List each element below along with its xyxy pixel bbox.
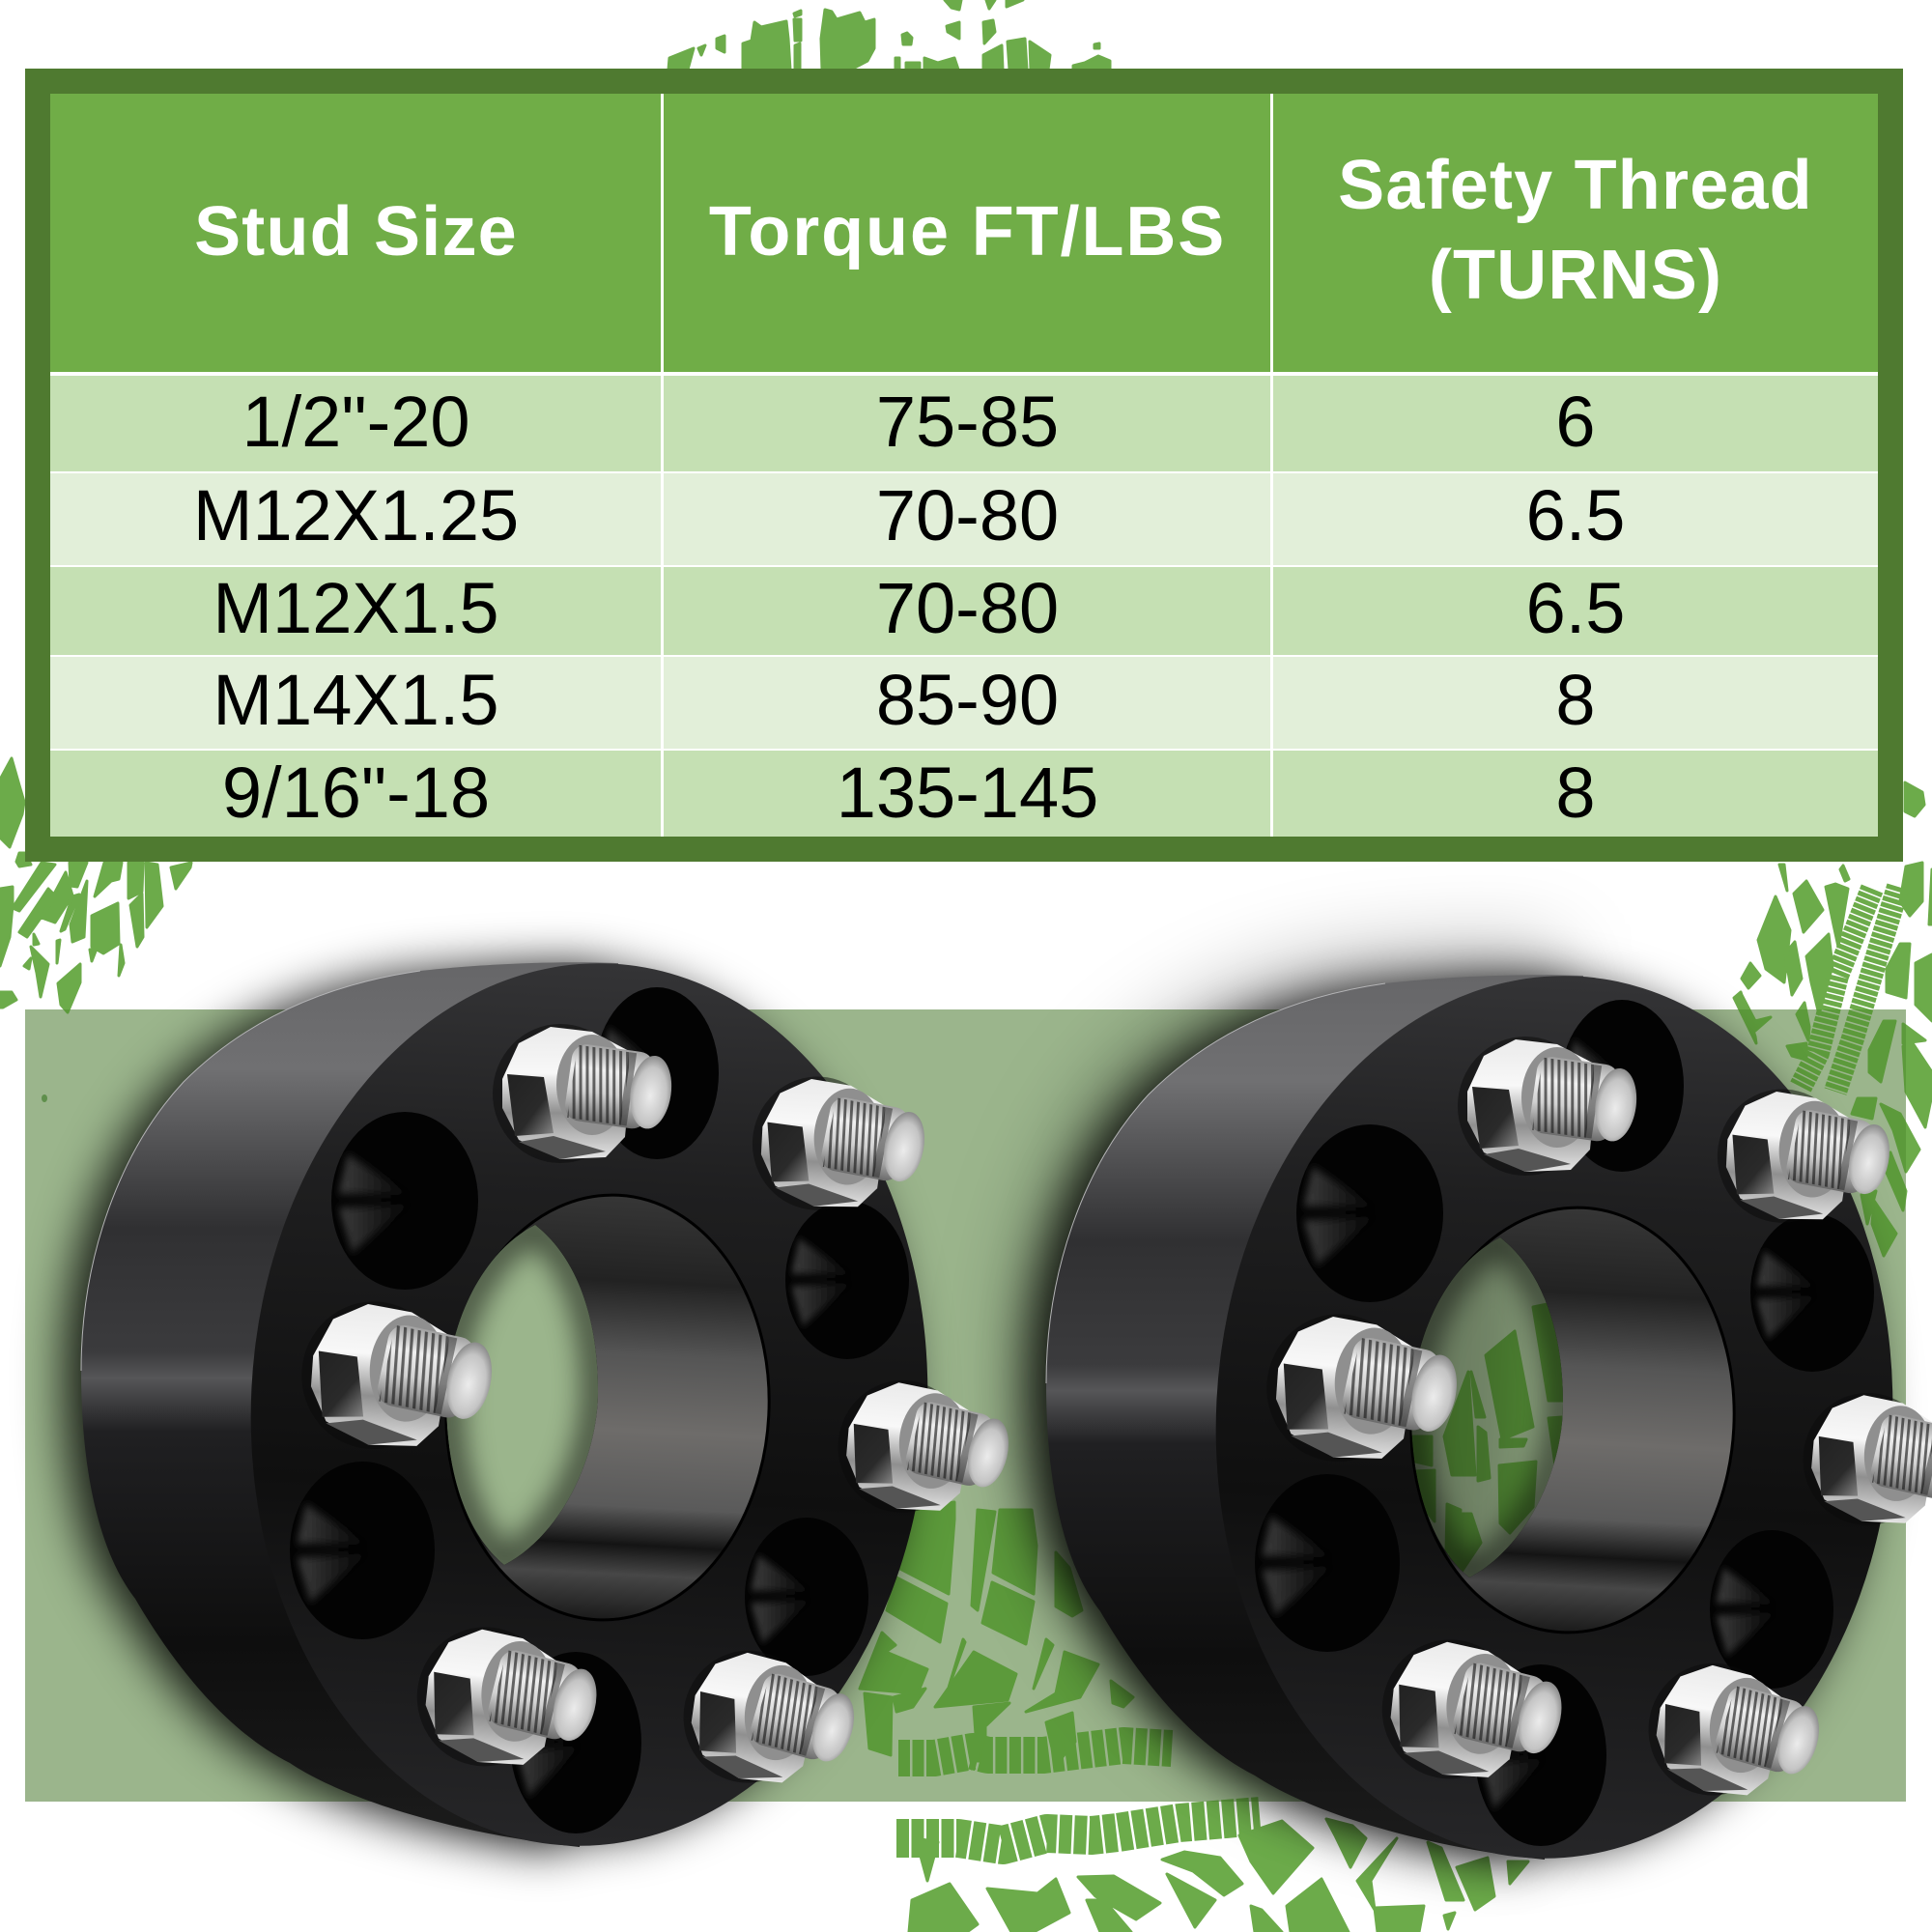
row 5 torque: 135-145 bbox=[837, 753, 1098, 833]
heading: Safety Thread (TURNS): Safety Thread bbox=[1338, 147, 1813, 224]
row 1 stud: 1/2"-20 bbox=[242, 382, 470, 462]
row 2 torque: 70-80 bbox=[876, 475, 1059, 555]
panel speck bbox=[42, 1094, 47, 1102]
row 2 stud: M12X1.25 bbox=[193, 475, 519, 555]
row background 1 bbox=[50, 376, 1878, 471]
heading: Safety Thread (TURNS) bbox=[1338, 147, 1813, 314]
wide soft shadow of right spacer bbox=[1017, 951, 1554, 1835]
heading: Stud Size: Stud Size bbox=[194, 193, 518, 270]
row 5 stud: 9/16"-18 bbox=[222, 753, 490, 833]
header cell: torque bbox=[664, 94, 1271, 372]
table body separators bbox=[50, 372, 1878, 837]
row 3 stud: M12X1.5 bbox=[213, 568, 499, 648]
row background 2 bbox=[50, 473, 1878, 565]
row 4 stud: M14X1.5 bbox=[213, 660, 499, 740]
row 4 turns: 8 bbox=[1555, 660, 1596, 740]
shadow of left spacer bbox=[64, 966, 908, 1851]
wheel spacer: right bbox=[1046, 958, 1932, 1876]
shadow of right spacer bbox=[1029, 979, 1873, 1863]
row 3 torque: 70-80 bbox=[876, 568, 1059, 648]
header cell: stud size bbox=[50, 94, 662, 372]
header cell: safety thread bbox=[1273, 94, 1878, 372]
row background 4 bbox=[50, 657, 1878, 749]
green background panel bbox=[25, 1009, 1906, 1802]
heading: Torque FT/LBS: Torque FT/LBS bbox=[709, 193, 1226, 270]
row 3 turns: 6.5 bbox=[1526, 568, 1625, 648]
row 1 turns: 6 bbox=[1555, 382, 1596, 462]
row background 3 bbox=[50, 567, 1878, 655]
row 5 turns: 8 bbox=[1555, 753, 1596, 833]
tyre tread on green panel bbox=[64, 1009, 1906, 1802]
wheel spacer: left bbox=[81, 946, 1018, 1863]
heading: Safety Thread (TURNS): (TURNS) bbox=[1429, 237, 1722, 314]
row 4 torque: 85-90 bbox=[876, 660, 1059, 740]
row 2 turns: 6.5 bbox=[1526, 475, 1625, 555]
row background 5 bbox=[50, 751, 1878, 837]
row 1 torque: 75-85 bbox=[876, 382, 1059, 462]
torque specification table bbox=[25, 69, 1903, 862]
